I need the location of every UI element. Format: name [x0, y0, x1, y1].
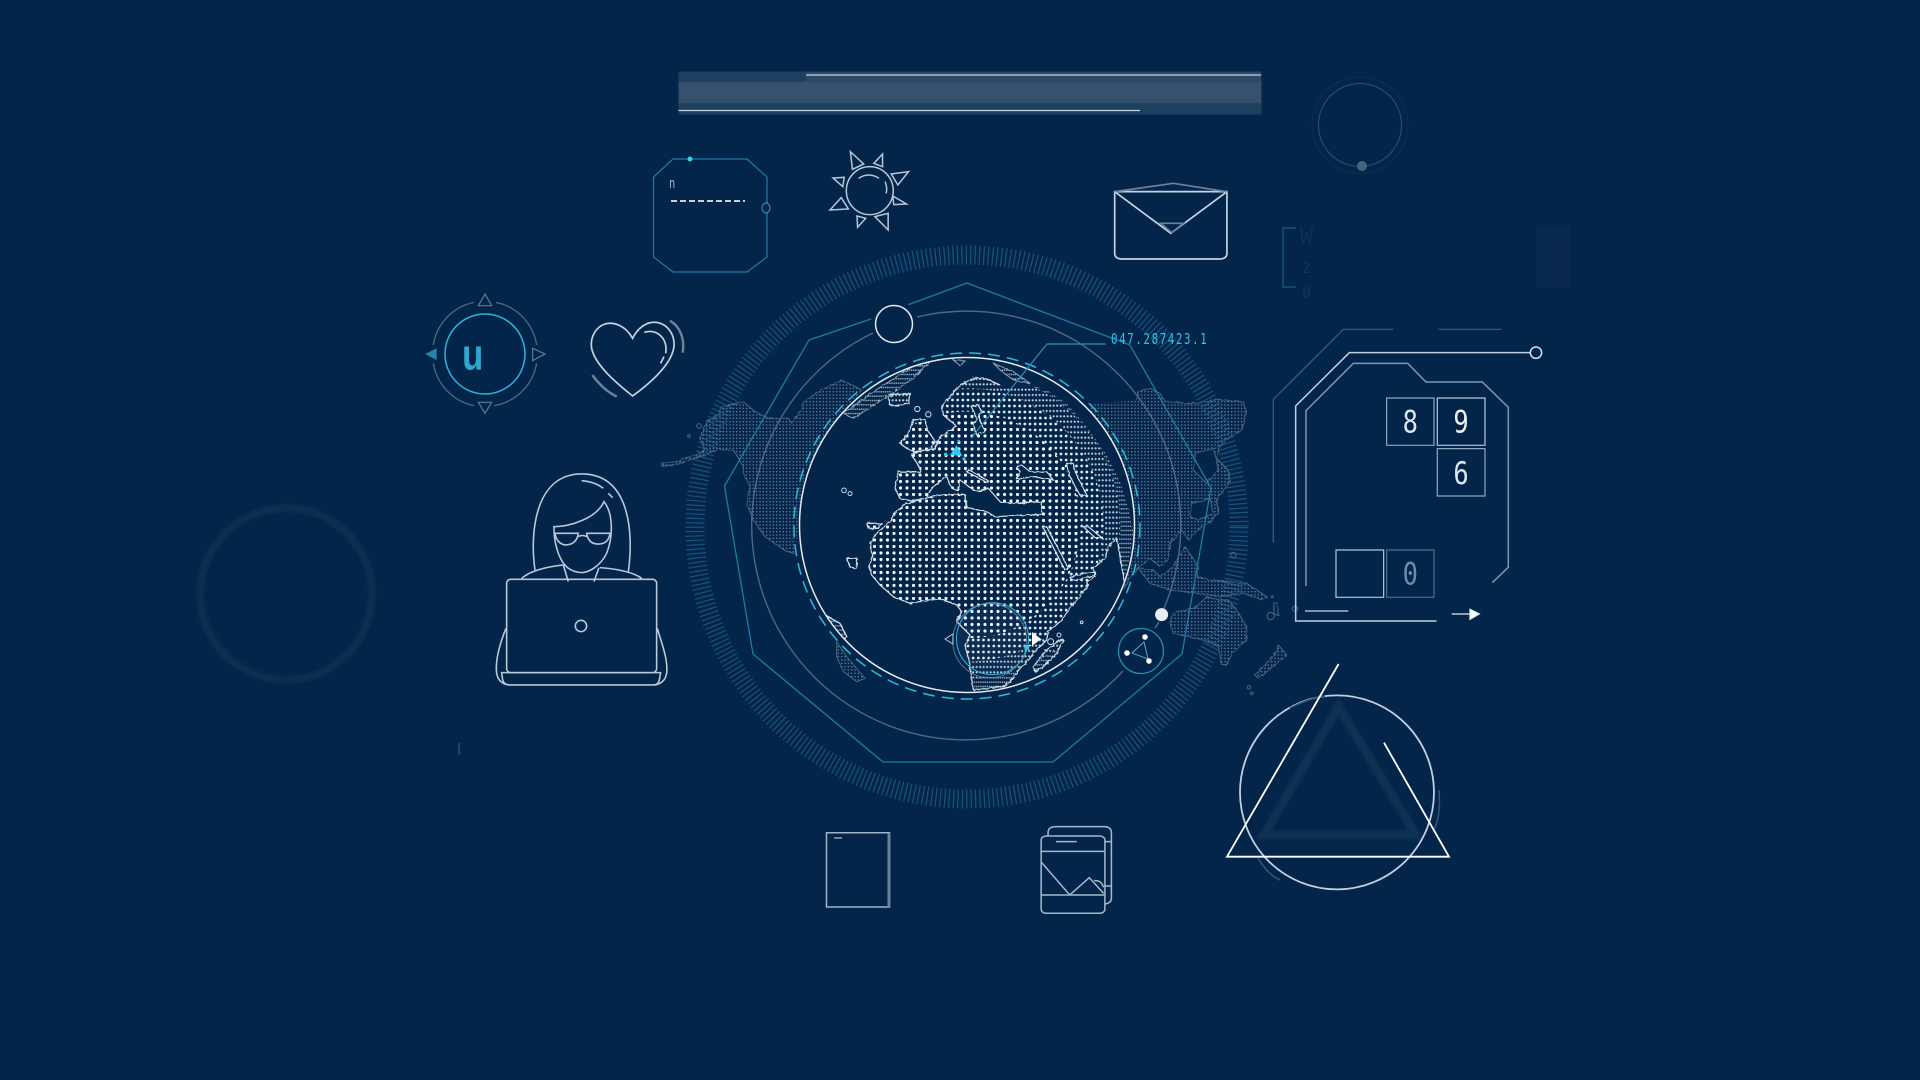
dim bracket readout — [1283, 225, 1314, 302]
arrow — [1452, 609, 1479, 619]
bar body — [678, 72, 1262, 114]
digits: 9 — [1453, 404, 1469, 440]
digits: 8 — [1403, 404, 1418, 440]
seas — [825, 360, 1124, 690]
small islands — [842, 406, 1083, 645]
coordinate callout: 047.287423.1 — [1111, 331, 1207, 349]
tick ring — [695, 255, 1239, 799]
digits: 6 — [1453, 456, 1469, 492]
dim bracket readout: 2 — [1302, 259, 1311, 277]
dim bracket readout: 0 — [1302, 284, 1311, 302]
panel: octagon note: n — [669, 174, 675, 191]
outer polygon frame — [724, 283, 1211, 762]
faint Asia and Oceania — [1090, 383, 1298, 695]
coastline — [825, 378, 1124, 690]
panel: octagon note — [654, 156, 770, 272]
south Africa target reticle — [945, 603, 1041, 678]
dim circuit lines — [1273, 329, 1502, 543]
dashed globe ring — [794, 353, 1140, 699]
faint South America — [836, 640, 866, 682]
dim arctic coast — [843, 360, 1030, 418]
faint Americas — [661, 379, 862, 554]
icon: sun — [830, 152, 909, 230]
dotted continents — [826, 359, 1134, 692]
main circuit line — [1296, 353, 1530, 621]
grey orbit ring — [752, 311, 1181, 740]
location marker — [944, 440, 966, 461]
dim bracket readout: W — [1300, 225, 1314, 250]
dim side block — [1537, 226, 1570, 288]
digits: 0 — [1403, 556, 1418, 592]
faint world map — [655, 370, 1298, 695]
icon: compass dial: u — [462, 331, 483, 379]
triangle and circle emblem — [1227, 664, 1449, 889]
network node icon — [1118, 628, 1164, 674]
white orbit ball — [1155, 608, 1168, 628]
icon: image stack — [1041, 827, 1111, 913]
HUD infographic canvas — [196, 71, 1542, 914]
faint large ring — [200, 508, 372, 680]
globe — [794, 353, 1140, 699]
coordinate callout — [972, 331, 1207, 437]
dim orbit circle — [1312, 77, 1408, 173]
faint tick mark — [458, 743, 460, 755]
header bar — [678, 72, 1262, 114]
digits — [1403, 404, 1469, 592]
short dash — [1305, 610, 1348, 612]
icon: book — [826, 833, 890, 907]
panel: digit circuit — [1273, 329, 1542, 621]
faint inner triangle — [1264, 707, 1416, 835]
icon: compass dial — [425, 294, 545, 413]
icon: envelope — [1115, 183, 1227, 259]
terminal node — [1530, 347, 1542, 358]
globe disc — [800, 358, 1134, 692]
globe outline — [800, 358, 1134, 692]
digit boxes — [1336, 398, 1485, 597]
small node circle on orbit — [876, 306, 912, 342]
icon: heart — [591, 321, 683, 397]
icon: woman at laptop — [496, 474, 667, 685]
inner circuit line — [1306, 363, 1508, 586]
